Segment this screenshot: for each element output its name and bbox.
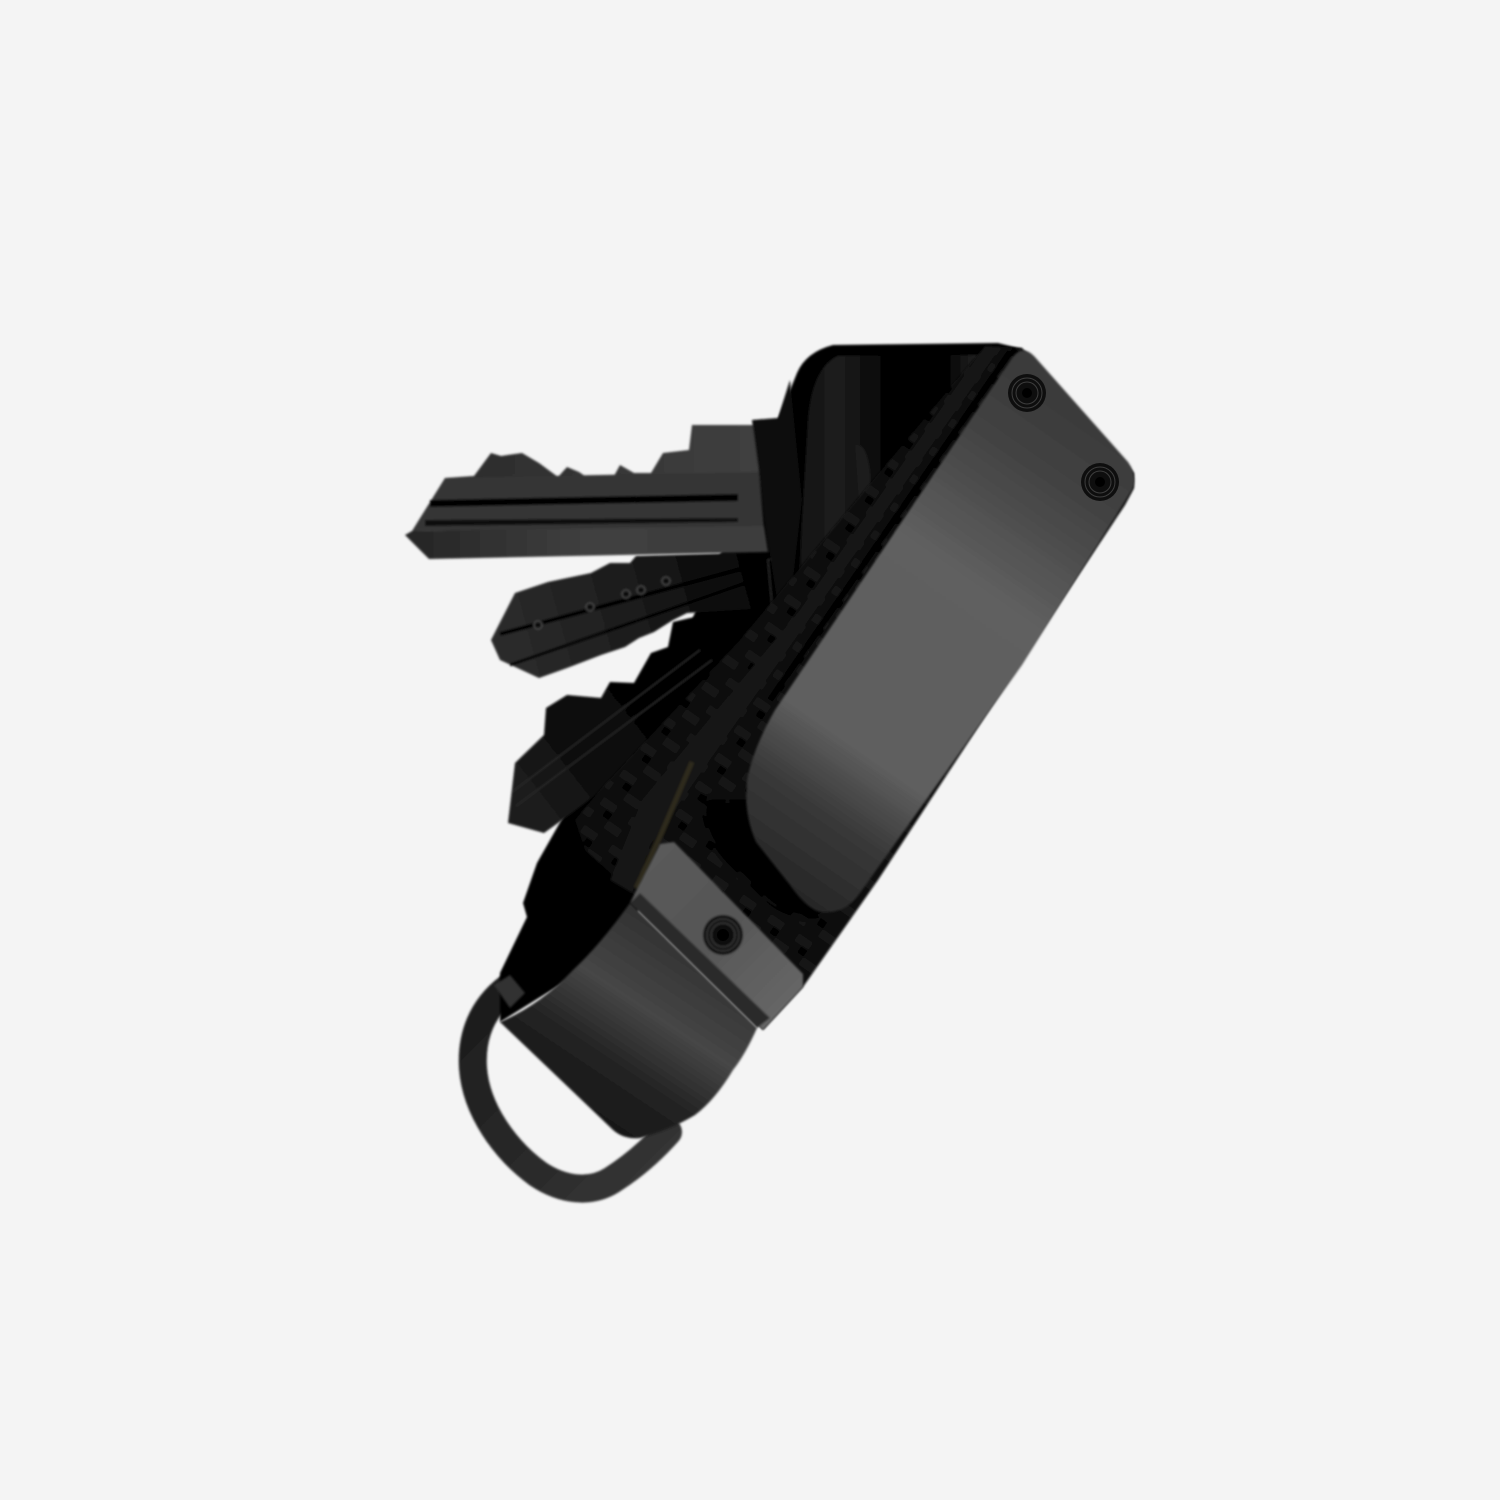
clip shadow [702,800,830,918]
lower end cap [494,903,757,1138]
split ring [473,988,668,1189]
icon: screw [703,915,743,955]
metal plate with screw [630,842,803,1030]
key 2 (middle) [491,552,790,678]
belt clip front panel [746,350,1134,912]
icon: right screw [1081,463,1119,501]
holder back and interior [500,343,1022,1022]
key 3 (lower) [508,610,780,833]
key 1 (top) [405,380,802,650]
carbon fibre body [575,346,1134,1030]
icon: top screw [1008,374,1046,412]
